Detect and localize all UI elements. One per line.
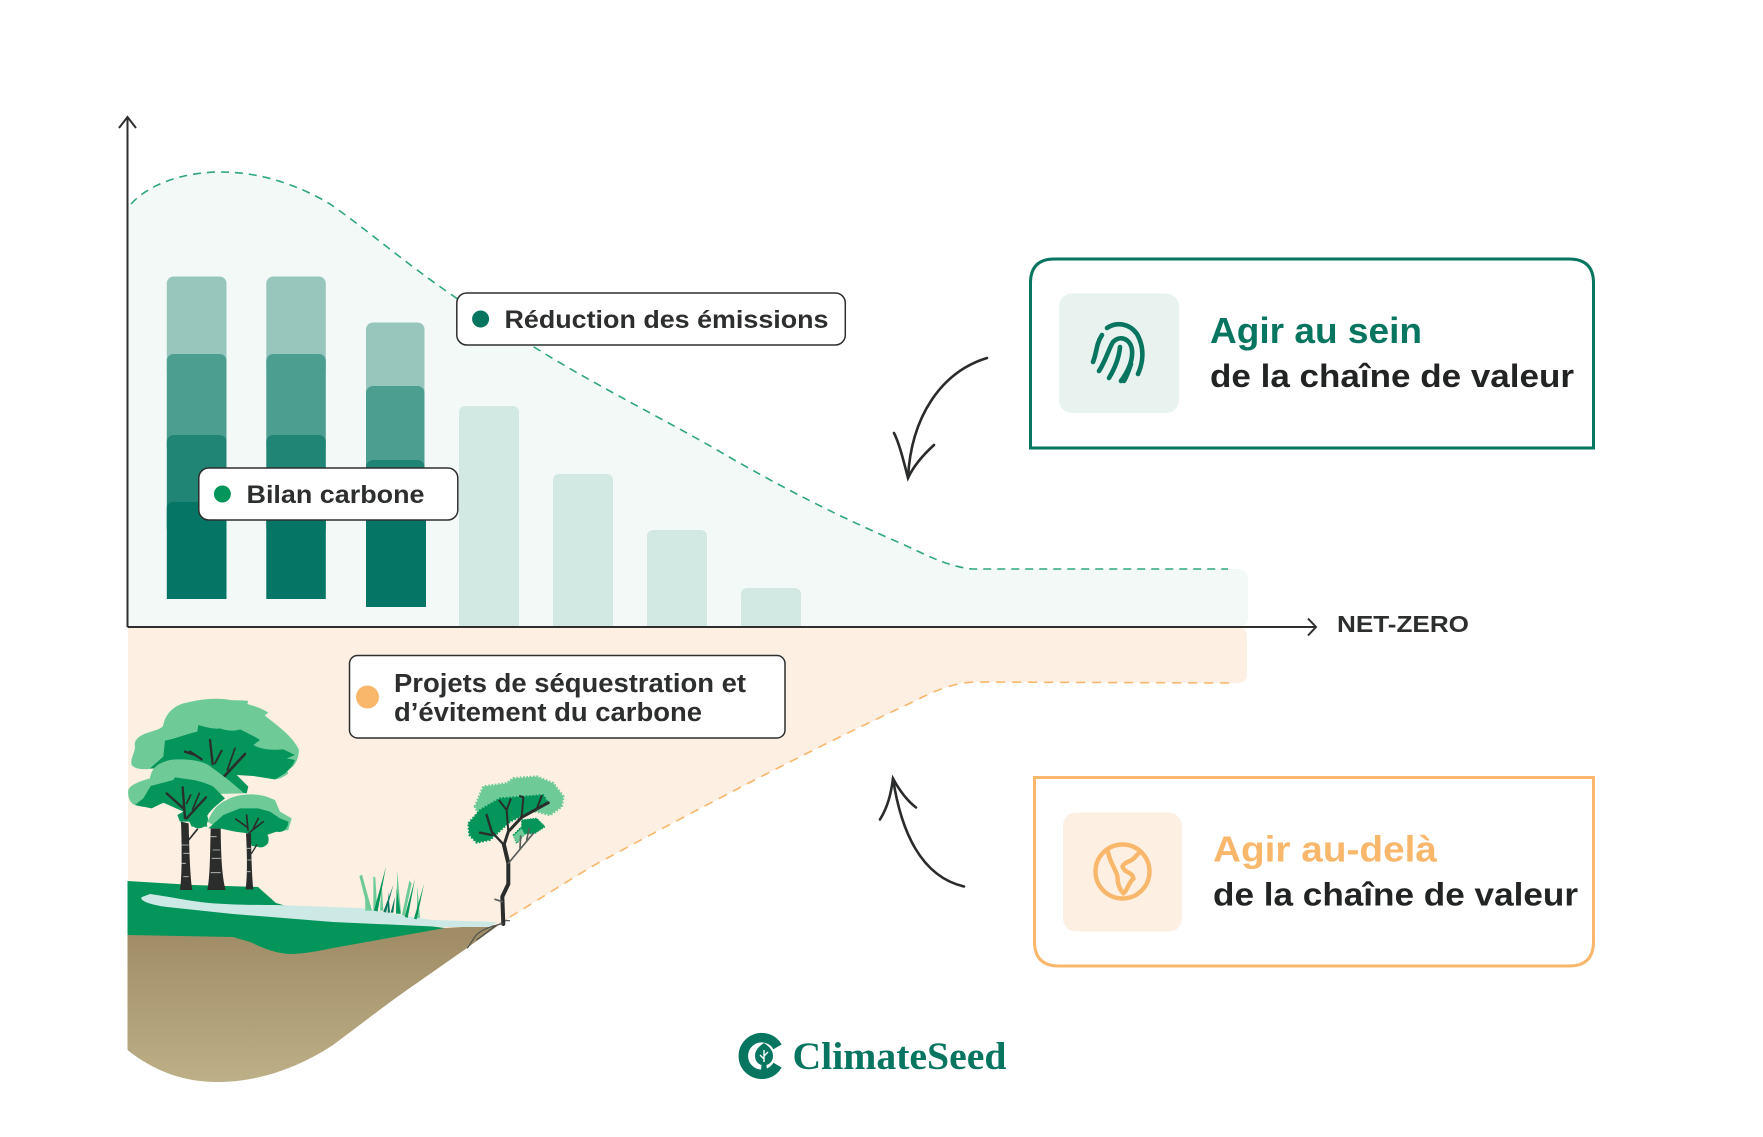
- label: carbon footprint: [199, 468, 458, 520]
- label: sequestration projects: d’évitement du carbone: [394, 699, 702, 727]
- sapling: [467, 777, 563, 948]
- logo mark: [743, 1038, 778, 1074]
- reeds: [359, 867, 424, 919]
- bar 1: [167, 276, 226, 599]
- offset projects area: [128, 628, 1247, 945]
- icon: globe: [1063, 812, 1182, 932]
- x axis: [128, 618, 1316, 636]
- card 1 subtitle: de la chaîne de valeur: [1210, 358, 1574, 394]
- logo: [743, 1035, 1007, 1078]
- projected bar 4: [459, 406, 519, 626]
- bar 3: [366, 322, 426, 607]
- card 1 title: Agir au sein: [1210, 310, 1422, 351]
- label: sequestration projects: [350, 656, 785, 738]
- card 2 subtitle: de la chaîne de valeur: [1213, 876, 1578, 912]
- card 2 title: Agir au-delà: [1213, 828, 1438, 870]
- bar chart: [167, 276, 801, 626]
- emissions reduction area: [128, 172, 1248, 626]
- card: within value chain: [1030, 259, 1594, 448]
- label: sequestration projects: Projets de séquestration et: [394, 670, 747, 698]
- projected bar 7: [741, 588, 801, 626]
- icon: fingerprint: [1059, 294, 1179, 413]
- axes: [119, 117, 1316, 636]
- projected bar 6: [647, 530, 707, 626]
- label: carbon footprint: Bilan carbone: [246, 481, 425, 509]
- arrow: into value chain: [894, 358, 987, 478]
- label: emissions reduction: Réduction des émissions: [504, 306, 828, 334]
- grove of trees: [128, 699, 299, 890]
- card: beyond value chain: [1034, 778, 1594, 966]
- projected bar 5: [553, 474, 613, 626]
- label: emissions reduction: [457, 293, 845, 345]
- small tree: [207, 794, 292, 889]
- bar 2: [266, 276, 326, 599]
- y axis: [119, 117, 136, 627]
- green ground: [128, 881, 445, 954]
- soil: [128, 917, 510, 1082]
- net-zero label: NET-ZERO: [1337, 611, 1469, 637]
- water: [141, 894, 497, 927]
- back tree: [131, 699, 299, 890]
- middle tree: [128, 759, 244, 890]
- logo wordmark: ClimateSeed: [792, 1035, 1007, 1078]
- arrow: beyond value chain: [880, 778, 964, 886]
- roots: [467, 921, 510, 948]
- back trunk highlights: [211, 837, 221, 873]
- landscape illustration: [128, 699, 563, 1082]
